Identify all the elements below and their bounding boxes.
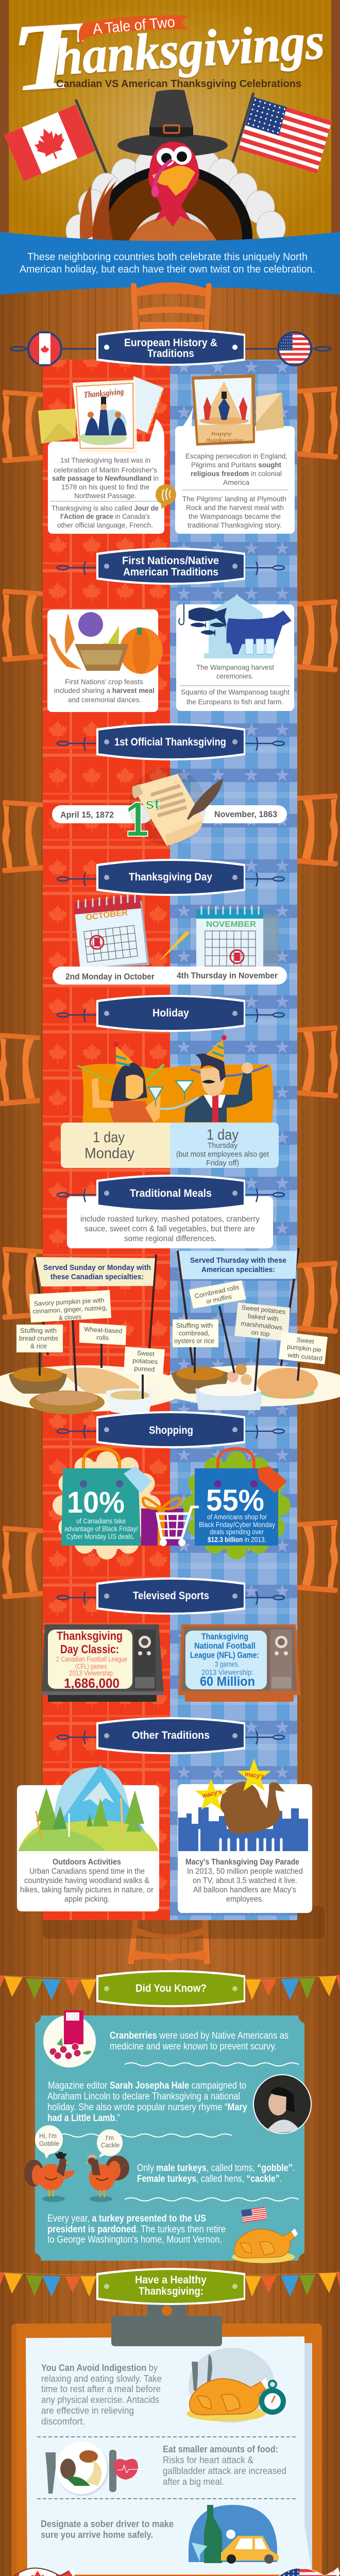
balloon turkey bbox=[220, 1782, 285, 1834]
text: Canada history: l'Action de grace in Canada's bbox=[60, 512, 150, 520]
heading: Did You Know bbox=[96, 1970, 245, 2007]
panel: Canada history card bbox=[38, 376, 164, 534]
text: Macy's: In 2013, 50 million people watched bbox=[187, 1867, 303, 1876]
label: stuffing bread crumbs: Stuffing with bbox=[20, 1327, 57, 1334]
tip: sober driver bbox=[41, 2519, 174, 2540]
sign: American specialties bbox=[179, 1251, 297, 1279]
heading: Traditional Meals bbox=[57, 1175, 284, 1212]
heading: European History bbox=[96, 329, 245, 366]
text: USA history: traditional Thanksgiving story. bbox=[188, 521, 282, 529]
hen turkey bbox=[84, 2155, 129, 2202]
text: USA history: religious freedom in colonial bbox=[191, 469, 282, 478]
label: stuffing bread crumbs: & rice bbox=[30, 1343, 47, 1350]
tip: smaller amounts: Risks for heart attack & bbox=[163, 2455, 253, 2465]
sign: Canadian specialties bbox=[36, 1257, 155, 1286]
panel: clipboard bbox=[11, 2303, 322, 2576]
date pill: 4th Thursday in November bbox=[177, 971, 278, 980]
text: Canada history: 1578 on his quest to find the bbox=[61, 483, 149, 491]
intro text bbox=[20, 251, 315, 275]
fact: Sarah Hale: Magazine editor Sarah Josepha Hale campaigned to bbox=[48, 2080, 246, 2091]
label: stuffing cornbread: cornbread, bbox=[179, 1330, 210, 1337]
stat: USA 55% bbox=[182, 1449, 291, 1560]
stat: USA 55%: deals spending over bbox=[210, 1528, 264, 1536]
tip: smaller amounts: gallbladder attack are increased bbox=[163, 2466, 286, 2476]
panel: first official dates bbox=[52, 768, 287, 847]
text: Canada TV: Day Classic: bbox=[60, 1642, 119, 1656]
label: savory pumpkin pie: cinnamon, ginger, nutmeg, bbox=[32, 1304, 108, 1315]
fact: gobble and cackle: Only male turkeys, called toms, “gobble”. bbox=[137, 2163, 295, 2174]
label: sweet potatoes marshmallows: Sweet potatoes bbox=[241, 1304, 286, 1316]
heading: Thanksgiving Day: Thanksgiving Day bbox=[129, 871, 212, 883]
fact: pardoned turkey bbox=[47, 2213, 226, 2245]
text: Macy's bbox=[185, 1858, 303, 1904]
label: sweet potatoes marshmallows: baked with bbox=[247, 1312, 279, 1323]
heading: European History: Traditions bbox=[147, 348, 194, 360]
sign: Canadian specialties: these Canadian specialties: bbox=[50, 1273, 144, 1281]
icon: Canadian flag turkey bbox=[13, 2567, 76, 2576]
text: Canada TV: Thanksgiving bbox=[57, 1629, 123, 1642]
heading: 1st Official Thanksgiving: 1st Official Thanksgiving bbox=[114, 736, 226, 748]
heading: Televised Sports bbox=[57, 1578, 284, 1615]
illustration: greeting card Canada: Thanksgiving bbox=[83, 386, 124, 400]
illustration: parade skyline bbox=[178, 1758, 308, 1851]
cackle bubble bbox=[97, 2129, 123, 2158]
tom turkey bbox=[24, 2152, 75, 2202]
label: savory pumpkin pie bbox=[29, 1290, 111, 1323]
panel: table with foods bbox=[0, 1248, 340, 1414]
heading: Other Traditions bbox=[57, 1717, 284, 1754]
panel: USA TV bbox=[178, 1624, 300, 1702]
stat: Canada 10%: advantage of Black Friday/ bbox=[64, 1525, 138, 1533]
label: wheat rolls: rolls bbox=[96, 1334, 109, 1342]
illustration: bottle and car bbox=[189, 2505, 279, 2564]
heading: Traditional Meals: Traditional Meals bbox=[130, 1188, 212, 1199]
text: outdoors: countryside having woodland walks & bbox=[24, 1876, 150, 1885]
text: outdoors bbox=[20, 1858, 154, 1904]
pennants: did you know bbox=[0, 1975, 340, 2000]
closing banner bbox=[17, 2575, 318, 2576]
fact: gobble and cackle: Female turkeys, called hens, “cackle”. bbox=[137, 2174, 282, 2184]
heading: Have a Healthy Thanksgiving: Have a Healthy bbox=[135, 2274, 207, 2286]
heading: Thanksgiving Day bbox=[57, 859, 284, 896]
label: stuffing bread crumbs: bread crumbs bbox=[19, 1335, 58, 1342]
text: meals intro: some regional differences. bbox=[124, 1234, 216, 1243]
text: Canada history: Northwest Passage. bbox=[74, 492, 137, 500]
tip: smaller amounts bbox=[163, 2444, 286, 2487]
illustration: church, fish, cow bbox=[179, 594, 292, 658]
food: Canada dishes bbox=[9, 1367, 154, 1414]
illustration: Canadian flag bbox=[4, 99, 107, 181]
text: Macy's: employees. bbox=[226, 1895, 264, 1904]
illustration: October calendar bbox=[74, 895, 149, 969]
icon: gift and cart bbox=[141, 1498, 199, 1546]
panel: holiday length USA: 1 day bbox=[207, 1127, 239, 1143]
text: Canada TV: (CFL) games. bbox=[75, 1663, 108, 1670]
intro text: American holiday, but each have their own twist on the celebration. bbox=[20, 264, 315, 275]
date pill: 2nd Monday in October bbox=[65, 972, 155, 981]
portrait: Sarah Josepha Hale bbox=[253, 2075, 311, 2133]
chair: top bbox=[131, 282, 212, 330]
icon: yellow pen bbox=[159, 930, 190, 961]
food sticks bbox=[40, 1306, 299, 1399]
text: outdoors: Urban Canadians spend time in the bbox=[29, 1867, 145, 1876]
date pill: USA bbox=[196, 805, 287, 823]
panel: outdoors bbox=[17, 1765, 159, 1911]
fact: pardoned turkey: president is pardoned. The turkeys then retire bbox=[47, 2224, 226, 2235]
cackle bubble: I'm bbox=[106, 2134, 114, 2142]
stat: Canada 10%: 10% bbox=[67, 1486, 125, 1519]
label: stuffing cornbread: Stuffing with bbox=[176, 1322, 213, 1329]
heading: First Nations: First Nations/Native bbox=[122, 555, 219, 567]
heading: Holiday: Holiday bbox=[152, 1007, 189, 1019]
illustration: US flag bbox=[232, 93, 332, 174]
label: sweet potatoes marshmallows bbox=[234, 1302, 290, 1341]
tip: smaller amounts: Eat smaller amounts of food: bbox=[163, 2444, 278, 2454]
fact: Sarah Hale: holiday. She also wrote popular nursery rhyme “Mary bbox=[47, 2102, 247, 2113]
text: outdoors: Outdoors Activities bbox=[53, 1858, 121, 1867]
sign: American specialties: Served Thursday with these bbox=[190, 1256, 286, 1265]
sign poles bbox=[35, 1248, 299, 1368]
illustration: pilgrim turkey bbox=[66, 90, 285, 309]
illustration: greeting card USA bbox=[192, 374, 255, 446]
illustration: November calendar bbox=[196, 907, 279, 967]
text: USA history: the Wampanoags became the bbox=[189, 512, 281, 520]
text: Canada history bbox=[50, 456, 159, 529]
label: cornbread: Cornbread rolls bbox=[194, 1283, 240, 1300]
fact: pardoned turkey: Every year, a turkey presented to the US bbox=[47, 2213, 206, 2224]
illustration: party couple bbox=[77, 1035, 274, 1123]
text: USA TV: League (NFL) Game: bbox=[190, 1650, 259, 1660]
main title: T bbox=[8, 2, 91, 112]
date pill: Canada bbox=[52, 805, 152, 823]
label: sweet potatoes marshmallows: on top bbox=[251, 1329, 270, 1338]
illustration: November calendar: NOVEMBER bbox=[206, 920, 256, 929]
balloon stars bbox=[195, 1758, 271, 1810]
balloon stars: macy's bbox=[201, 1788, 223, 1800]
label: stuffing cornbread: oysters or rice bbox=[174, 1337, 214, 1345]
label: savory pumpkin pie: Savory pumpkin pie with bbox=[33, 1296, 105, 1308]
label: sweet pumpkin pie bbox=[279, 1332, 328, 1364]
panel: USA history card bbox=[175, 374, 295, 534]
panel: holiday length USA: Friday off) bbox=[206, 1159, 239, 1167]
text: Canada TV: 2 Canadian Football League bbox=[56, 1655, 127, 1663]
fact: Sarah Hale: Abraham Lincoln to declare Thanksgiving a national bbox=[47, 2091, 240, 2102]
text: Canada history: Thanksgiving is also called Jour de bbox=[52, 504, 159, 512]
label: sweet potatoes pureed: potatoes bbox=[132, 1357, 158, 1365]
panel: holiday length USA: (but most employees also get bbox=[176, 1150, 269, 1159]
text: First Nations bbox=[54, 677, 155, 704]
label: stuffing bread crumbs bbox=[16, 1325, 63, 1352]
pennants: healthy bbox=[0, 2272, 340, 2297]
panel: did you know bbox=[24, 2010, 311, 2263]
text: Macy's: on TV, about 3.5 watched it live. bbox=[193, 1876, 297, 1885]
date pill: USA: November, 1863 bbox=[214, 809, 277, 819]
text: Canada TV bbox=[56, 1629, 127, 1691]
text: USA TV bbox=[190, 1632, 259, 1689]
icon: blue envelope bbox=[133, 376, 164, 433]
panel: Canada TV bbox=[42, 1624, 164, 1702]
text: First Nations: included sharing a harvest meal bbox=[54, 686, 155, 694]
gobble bubble: Gobble bbox=[39, 2140, 59, 2147]
illustration: greeting card USA: thanksgiving bbox=[206, 436, 243, 444]
heading: Shopping: Shopping bbox=[149, 1425, 193, 1436]
tip: indigestion: You Can Avoid Indigestion by bbox=[41, 2363, 158, 2373]
stat: Canada 10% bbox=[53, 1449, 161, 1560]
text: Canada history: other official language, French. bbox=[57, 521, 153, 529]
text: Canada history: 1st Thanksgiving feast was in bbox=[60, 456, 150, 464]
chairs: right side bbox=[297, 386, 338, 1593]
gobble bubble: Hi, I'm bbox=[39, 2132, 57, 2140]
illustration: talking turkeys bbox=[24, 2125, 129, 2202]
heading: Other Traditions: Other Traditions bbox=[132, 1730, 210, 1741]
label: stuffing cornbread bbox=[173, 1319, 218, 1347]
table plates bbox=[0, 1365, 340, 1412]
text: Canada history: safe passage to Newfoundland in bbox=[52, 474, 159, 482]
label: wheat rolls bbox=[79, 1323, 126, 1345]
text: USA TV: Thanksgiving bbox=[201, 1632, 248, 1641]
heading: European History: European History & bbox=[124, 337, 217, 349]
panel: Thanksgiving Day bbox=[53, 895, 287, 985]
icon: USA round flag bbox=[278, 332, 312, 366]
fact: cranberries: medicine and were known to prevent scurvy. bbox=[110, 2041, 277, 2052]
tip: sober driver: sure you arrive home safely. bbox=[41, 2530, 153, 2540]
tablecloth: Canada bbox=[43, 360, 170, 1920]
label: sweet potatoes pureed: Sweet bbox=[137, 1349, 155, 1358]
fact: Sarah Hale: had a Little Lamb.” bbox=[47, 2113, 120, 2124]
illustration: cranberry juice bbox=[43, 2010, 96, 2067]
text: Canada history: celebration of Martin Frobisher's bbox=[54, 466, 157, 474]
icon: scroll and quill bbox=[129, 768, 223, 846]
text: USA TV: 2013 Viewership: bbox=[201, 1669, 253, 1677]
icon: tan envelope bbox=[256, 393, 284, 431]
text: Canada TV: 1,686,000 bbox=[64, 1675, 120, 1691]
panel: First Nations bbox=[47, 609, 163, 712]
title ribbon: A Tale of Two bbox=[92, 14, 176, 38]
text: Wampanoag: The Wampanoag harvest bbox=[196, 663, 274, 671]
tip: indigestion: are effective in relieving bbox=[41, 2405, 134, 2416]
subtitle: Canadian VS American Thanksgiving Celebrations bbox=[56, 78, 301, 90]
heading: Have a Healthy Thanksgiving: Thanksgiving: bbox=[139, 2285, 203, 2297]
panel: holiday length Canada bbox=[61, 1123, 170, 1168]
heading connector: flags and line bbox=[10, 347, 331, 351]
main title: hanksgivings bbox=[53, 12, 326, 86]
section: European History bbox=[10, 329, 331, 534]
text: Canada TV: 2013 Viewership: bbox=[69, 1669, 114, 1677]
icon: green 1st: st bbox=[145, 795, 160, 812]
tip: sober driver: Designate a sober driver to make bbox=[41, 2519, 174, 2529]
tip: smaller amounts: after a big meal. bbox=[163, 2477, 224, 2487]
tablecloth: USA bbox=[170, 360, 297, 1920]
stat: USA 55%: of Americans shop for bbox=[207, 1513, 267, 1521]
fact: pardoned turkey: to George Washington's home, Mount Vernon. bbox=[47, 2234, 222, 2245]
parade handlers bbox=[220, 1839, 281, 1851]
panel: Traditional Meals intro bbox=[67, 1196, 273, 1248]
fact: cranberries bbox=[110, 2030, 288, 2052]
text: USA history: Escaping persecution in England, bbox=[185, 452, 287, 460]
label: sweet potatoes pureed bbox=[124, 1347, 165, 1376]
tip: indigestion bbox=[41, 2363, 162, 2427]
illustration: turkey with flag bbox=[232, 2207, 298, 2263]
label: cornbread bbox=[189, 1280, 246, 1309]
illustration: October calendar: OCTOBER bbox=[85, 908, 128, 922]
chair: bottom bbox=[128, 1920, 210, 1964]
icon: gold speech bubble bbox=[156, 484, 176, 509]
cackle bubble: Cackle bbox=[101, 2142, 120, 2149]
panel: Wampanoag bbox=[176, 594, 294, 711]
text: First Nations: First Nations' crop feasts bbox=[65, 677, 143, 686]
header panel bbox=[0, 0, 340, 309]
text: USA history: Rock and the harvest meal with bbox=[186, 503, 284, 512]
label: wheat rolls: Wheat-based bbox=[84, 1326, 123, 1335]
stat: USA 55%: Black Friday/Cyber Monday bbox=[199, 1521, 275, 1529]
intro band bbox=[0, 232, 340, 295]
text: USA TV: 3 games. bbox=[215, 1660, 240, 1669]
illustration: turkey and stopwatch bbox=[186, 2348, 286, 2423]
text: Wampanoag: the Europeans to fish and farm. bbox=[186, 698, 283, 706]
panel: holiday length Canada: 1 day bbox=[93, 1129, 125, 1146]
text: meals intro bbox=[80, 1215, 260, 1243]
text: outdoors: apple picking. bbox=[64, 1895, 110, 1904]
heading: 1st Official Thanksgiving bbox=[57, 723, 284, 760]
text: First Nations: and ceremonial dances. bbox=[68, 696, 141, 704]
heading: First Nations bbox=[57, 548, 284, 585]
heading: Did You Know: Did You Know? bbox=[135, 1982, 207, 1994]
stat: Canada 10%: Cyber Monday US deals. bbox=[66, 1533, 134, 1540]
label: sweet potatoes pureed: pureed bbox=[134, 1365, 155, 1373]
stat: USA 55%: $12.3 billion in 2013. bbox=[208, 1536, 266, 1544]
illustration: harvest basket bbox=[49, 612, 163, 674]
tablecloth shadow bbox=[43, 1906, 325, 1939]
heading: Have a Healthy Thanksgiving bbox=[96, 2268, 245, 2305]
label: sweet potatoes marshmallows: marshmallows bbox=[241, 1320, 283, 1331]
tip: indigestion: any physical exercise. Antacids bbox=[41, 2395, 159, 2405]
fact: gobble and cackle bbox=[137, 2163, 295, 2184]
label: sweet pumpkin pie: Sweet bbox=[296, 1336, 315, 1345]
panel: shopping stats bbox=[53, 1449, 291, 1560]
icon: clip bbox=[111, 2303, 222, 2346]
text: USA history: Pilgrims and Puritans sought bbox=[191, 461, 281, 469]
fact: cranberries: Cranberries were used by Native Americans as bbox=[110, 2030, 288, 2041]
panel: holiday length Canada: Monday bbox=[84, 1145, 134, 1162]
food: USA dishes bbox=[171, 1364, 318, 1410]
text: meals intro: include roasted turkey, mashed potatoes, cranberry bbox=[80, 1215, 260, 1224]
fact: Sarah Hale bbox=[47, 2080, 247, 2124]
label: savory pumpkin pie: & cloves bbox=[59, 1313, 81, 1321]
chairs: left side bbox=[0, 390, 43, 1599]
icon: green 1st: 1 bbox=[125, 792, 149, 847]
text: USA history: The Pilgrims' landing at Plymouth bbox=[182, 495, 286, 503]
panel: Macy's parade bbox=[178, 1758, 312, 1913]
stat: Canada 10%: of Canadians take bbox=[76, 1517, 126, 1525]
label: sweet pumpkin pie: pumpkin pie bbox=[286, 1343, 322, 1354]
icon: Canada round flag bbox=[28, 332, 61, 365]
illustration: greeting card USA: happy bbox=[211, 431, 232, 437]
sign: American specialties: American specialties: bbox=[201, 1265, 275, 1274]
text: USA TV: 60 Million bbox=[200, 1674, 255, 1689]
sign: Canadian specialties: Served Sunday or Monday with bbox=[43, 1263, 151, 1272]
heading: Shopping bbox=[57, 1411, 284, 1448]
balloon stars: macy's bbox=[245, 1770, 265, 1780]
text: Macy's: Macy's Thanksgiving Day Parade bbox=[185, 1858, 299, 1867]
tip: indigestion: time to rest after a meal before bbox=[41, 2384, 161, 2394]
panel: holiday length USA: Thursday bbox=[208, 1141, 237, 1150]
text: Macy's: All balloon handlers are Macy's bbox=[193, 1886, 296, 1894]
tip: indigestion: relaxing and eating slowly. Take bbox=[41, 2374, 162, 2384]
label: sweet pumpkin pie: with custard bbox=[287, 1351, 323, 1362]
label: cornbread: or muffins bbox=[206, 1293, 232, 1306]
text: Wampanoag bbox=[180, 663, 291, 706]
gobble bubble bbox=[35, 2125, 63, 2159]
title ribbon bbox=[79, 14, 189, 43]
illustration: greeting card Canada bbox=[73, 380, 137, 453]
stat: USA 55%: 55% bbox=[206, 1484, 264, 1517]
illustration: plate and heart bbox=[45, 2442, 144, 2496]
text: Wampanoag: Squanto of the Wampanoag taught bbox=[181, 688, 290, 696]
tip: indigestion: discomfort. bbox=[41, 2416, 85, 2427]
heading: Televised Sports: Televised Sports bbox=[133, 1590, 209, 1602]
date pill bbox=[53, 967, 287, 985]
date pill: Canada: April 15, 1872 bbox=[60, 810, 114, 820]
heading: First Nations: American Traditions bbox=[123, 566, 218, 578]
text: Wampanoag: ceremonies. bbox=[216, 672, 253, 680]
icon: US flag turkey bbox=[279, 2567, 340, 2576]
intro text: These neighboring countries both celebrate this uniquely North bbox=[27, 251, 308, 263]
illustration: mountains and trees bbox=[18, 1765, 159, 1851]
text: outdoors: hikes, taking family pictures in nature, or bbox=[20, 1886, 154, 1894]
text: meals intro: sauce, sweet corn & fall vegetables, but there are bbox=[84, 1225, 255, 1233]
text: USA TV: National Football bbox=[194, 1641, 256, 1651]
panel: Holiday bbox=[61, 1035, 279, 1168]
heading: Holiday bbox=[57, 995, 284, 1032]
text: USA history: America bbox=[223, 478, 249, 486]
icon: yellow envelope bbox=[38, 409, 76, 444]
panel: holiday length USA bbox=[170, 1123, 279, 1168]
text: USA history bbox=[182, 452, 288, 529]
